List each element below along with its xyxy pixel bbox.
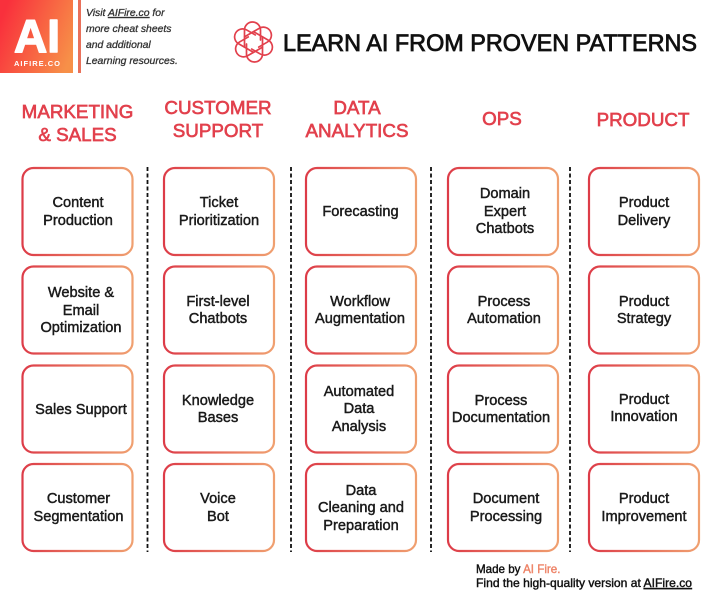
card: data cleaning and preparation: Preparation: [323, 518, 399, 534]
card: product improvement: Improvement: [601, 509, 687, 525]
card: knowledge bases: [164, 366, 274, 452]
card: customer segmentation: Segmentation: [33, 509, 124, 525]
card: product delivery: Delivery: [618, 213, 671, 229]
card: first-level chatbots: First-level: [186, 294, 250, 310]
card: automated data analysis: Data: [344, 401, 375, 417]
card: website and email optimization: Website &: [48, 285, 114, 301]
card: workflow augmentation: [306, 266, 416, 354]
card: process automation: Automation: [467, 311, 541, 327]
heading: marketing and sales: MARKETING: [22, 101, 133, 122]
card: product strategy: [589, 266, 699, 354]
footer credit: Made by AI Fire.: [476, 563, 560, 576]
card: product strategy: Product: [619, 294, 669, 310]
card: automated data analysis: [306, 366, 416, 452]
card: domain expert chatbots: Expert: [484, 204, 526, 220]
visit note: more cheat sheets: [86, 24, 171, 35]
card: domain expert chatbots: [448, 168, 558, 255]
card: product improvement: [589, 464, 699, 551]
card: content production: Production: [43, 213, 113, 229]
card: process documentation: [448, 366, 558, 452]
card: website and email optimization: Optimization: [40, 320, 122, 336]
card: document processing: [448, 464, 558, 551]
card: customer segmentation: [22, 464, 132, 551]
card: data cleaning and preparation: [306, 464, 416, 551]
heading: ops: OPS: [482, 108, 522, 129]
card: domain expert chatbots: Chatbots: [476, 221, 534, 237]
logo: AIFire badge: [0, 0, 73, 73]
card: document processing: Document: [473, 491, 539, 507]
card: forecasting: Forecasting: [322, 204, 399, 220]
panel: ops column: [448, 168, 558, 551]
card: workflow augmentation: Augmentation: [315, 311, 405, 327]
card: customer segmentation: Customer: [47, 491, 110, 507]
card: voice bot: Bot: [207, 509, 229, 525]
card: product strategy: Strategy: [617, 311, 672, 327]
card: content production: Content: [52, 195, 104, 211]
visit note: [86, 8, 178, 67]
accent bar: [78, 0, 81, 73]
card: knowledge bases: Knowledge: [182, 393, 254, 409]
heading: product: PRODUCT: [597, 109, 690, 130]
footer credit: Find the high-quality version at AIFire.co: [476, 577, 692, 590]
card: workflow augmentation: Workflow: [330, 294, 390, 310]
panel: marketing and sales column: [22, 168, 132, 551]
footer credit: [476, 563, 692, 590]
card: website and email optimization: [22, 266, 132, 354]
card: data cleaning and preparation: Cleaning and: [318, 500, 404, 516]
panel: customer support column: [164, 168, 274, 551]
card: process documentation: Documentation: [452, 410, 550, 426]
visit note: and additional: [86, 40, 151, 51]
card: process automation: [448, 266, 558, 354]
visit note: Visit AIFire.co for: [86, 8, 165, 19]
card: product innovation: [589, 366, 699, 452]
heading: customer support: SUPPORT: [173, 120, 264, 141]
card: ticket prioritization: Prioritization: [179, 213, 259, 229]
title: LEARN AI FROM PROVEN PATTERNS: [283, 30, 697, 57]
card: sales support: Sales Support: [35, 402, 127, 418]
card: ticket prioritization: [164, 168, 274, 255]
heading: data analytics: ANALYTICS: [306, 120, 408, 141]
card: ticket prioritization: Ticket: [200, 195, 238, 211]
card: voice bot: [164, 464, 274, 551]
card: data cleaning and preparation: Data: [346, 483, 377, 499]
logo: AIFire badge: AIFIRE.CO: [14, 59, 60, 68]
card: process documentation: Process: [475, 393, 527, 409]
card: product delivery: [589, 168, 699, 255]
card: automated data analysis: Analysis: [332, 419, 386, 435]
card: domain expert chatbots: Domain: [480, 186, 530, 202]
card: automated data analysis: Automated: [324, 384, 394, 400]
card: forecasting: [306, 168, 416, 255]
panel: product column: [589, 168, 699, 551]
column dividers: [148, 167, 570, 552]
card: process automation: Process: [478, 294, 530, 310]
heading: marketing and sales: & SALES: [38, 124, 117, 145]
card: product improvement: Product: [619, 491, 669, 507]
card: product innovation: Product: [619, 392, 669, 408]
card: first-level chatbots: Chatbots: [189, 311, 247, 327]
logo: AIFire badge: AI: [14, 10, 60, 62]
card: sales support: [22, 366, 132, 452]
card: website and email optimization: Email: [63, 303, 99, 319]
card: document processing: Processing: [470, 509, 542, 525]
card: first-level chatbots: [164, 266, 274, 354]
card: product innovation: Innovation: [610, 409, 678, 425]
heading: customer support: CUSTOMER: [164, 97, 272, 118]
panel: data analytics column: [306, 168, 416, 551]
icon: knot logo: [232, 22, 275, 62]
card: voice bot: Voice: [200, 491, 236, 507]
card: content production: [22, 168, 132, 255]
card: knowledge bases: Bases: [198, 410, 238, 426]
visit note: Learning resources.: [86, 56, 178, 67]
card: product delivery: Product: [619, 195, 669, 211]
heading: data analytics: DATA: [333, 97, 381, 118]
